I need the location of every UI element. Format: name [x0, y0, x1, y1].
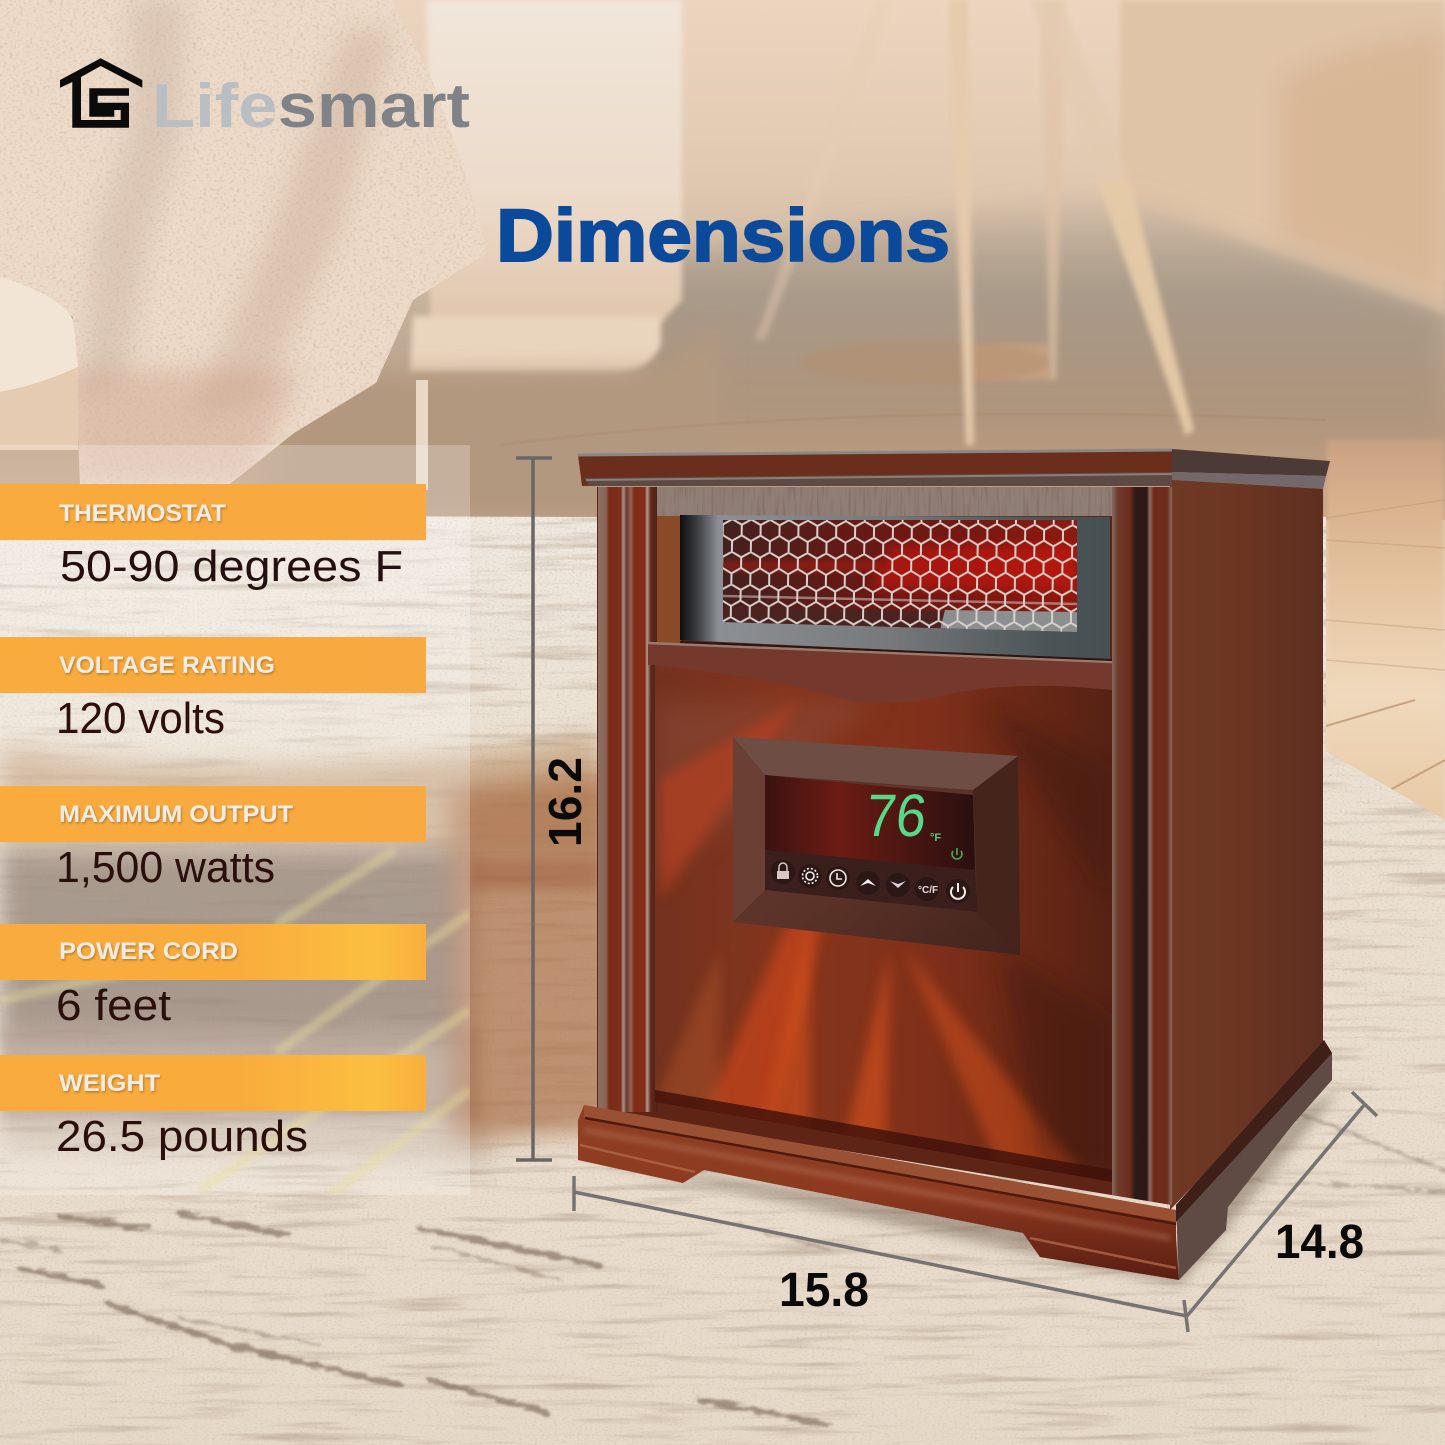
panel: specifications: [0, 445, 470, 1195]
bezel: [733, 737, 1020, 955]
lamp legs: [755, 0, 1194, 445]
floor under chair: [240, 330, 720, 520]
spec: thermostat: 50-90 degrees F: [60, 542, 403, 591]
floor wedge: [640, 190, 1445, 500]
planks: [1326, 440, 1445, 830]
heater illustration: [578, 449, 1340, 1285]
spec: power cord: 6 feet: [56, 981, 171, 1030]
spec: weight: [0, 1055, 426, 1161]
left column: [598, 487, 658, 1112]
door: [655, 665, 1112, 1182]
wall panels at right: [1120, 0, 1445, 315]
dimension: depth: [1187, 1092, 1377, 1316]
icon: standby: [952, 848, 962, 859]
spec: voltage rating: VOLTAGE RATING: [59, 652, 275, 679]
spec: maximum output: 1,500 watts: [56, 843, 275, 892]
spec: weight: 26.5 pounds: [56, 1112, 308, 1161]
grille: [680, 515, 1110, 660]
rug dark streaks: [0, 1110, 1445, 1425]
spec: power cord: [0, 924, 426, 1030]
label: 15.8: 15.8: [779, 1264, 869, 1317]
front body: [597, 487, 1172, 1205]
wordmark: Lifesmart: [152, 72, 470, 141]
heat rays behind panel: [0, 850, 470, 1195]
shelf: [648, 643, 1112, 703]
spec: thermostat: THERMOSTAT: [59, 500, 226, 527]
spec: power cord: POWER CORD: [59, 938, 238, 965]
base: [578, 1040, 1332, 1280]
rug: [0, 510, 1445, 1445]
spec: voltage rating: [0, 637, 426, 743]
spec: weight: WEIGHT: [59, 1070, 160, 1097]
spec: thermostat: [0, 484, 426, 591]
logo: [60, 58, 470, 141]
stool cushion: [0, 277, 78, 392]
recess: [657, 516, 681, 644]
spec: voltage rating: 120 volts: [56, 694, 225, 743]
unit: °F: [930, 832, 941, 844]
chair seat: [410, 316, 661, 372]
side panel: [1170, 478, 1323, 1210]
label: 16.2: 16.2: [539, 757, 591, 847]
blanket: [0, 0, 487, 484]
right column: [1112, 487, 1172, 1205]
title: Dimensions: [496, 194, 950, 277]
temperature readout: 76: [863, 782, 930, 849]
spec: maximum output: [0, 786, 426, 892]
control panel: [733, 737, 1020, 955]
buttons: °C/F: [918, 885, 938, 896]
top slab: [578, 449, 1330, 489]
dimension: width: [574, 1176, 1188, 1332]
round table base: [972, 344, 1050, 380]
dimension: height: [516, 458, 591, 1160]
chair leg: [416, 380, 428, 490]
shadow: [590, 1090, 1340, 1285]
icon: house: [60, 58, 142, 128]
chair back: [427, 0, 682, 322]
heat rays: [655, 700, 1112, 1190]
label: 14.8: 14.8: [1275, 1216, 1364, 1269]
spec: maximum output: MAXIMUM OUTPUT: [59, 801, 293, 828]
display: [765, 775, 975, 872]
buttons: [771, 860, 970, 903]
button strip: [765, 850, 978, 912]
header strip: [657, 487, 1112, 516]
